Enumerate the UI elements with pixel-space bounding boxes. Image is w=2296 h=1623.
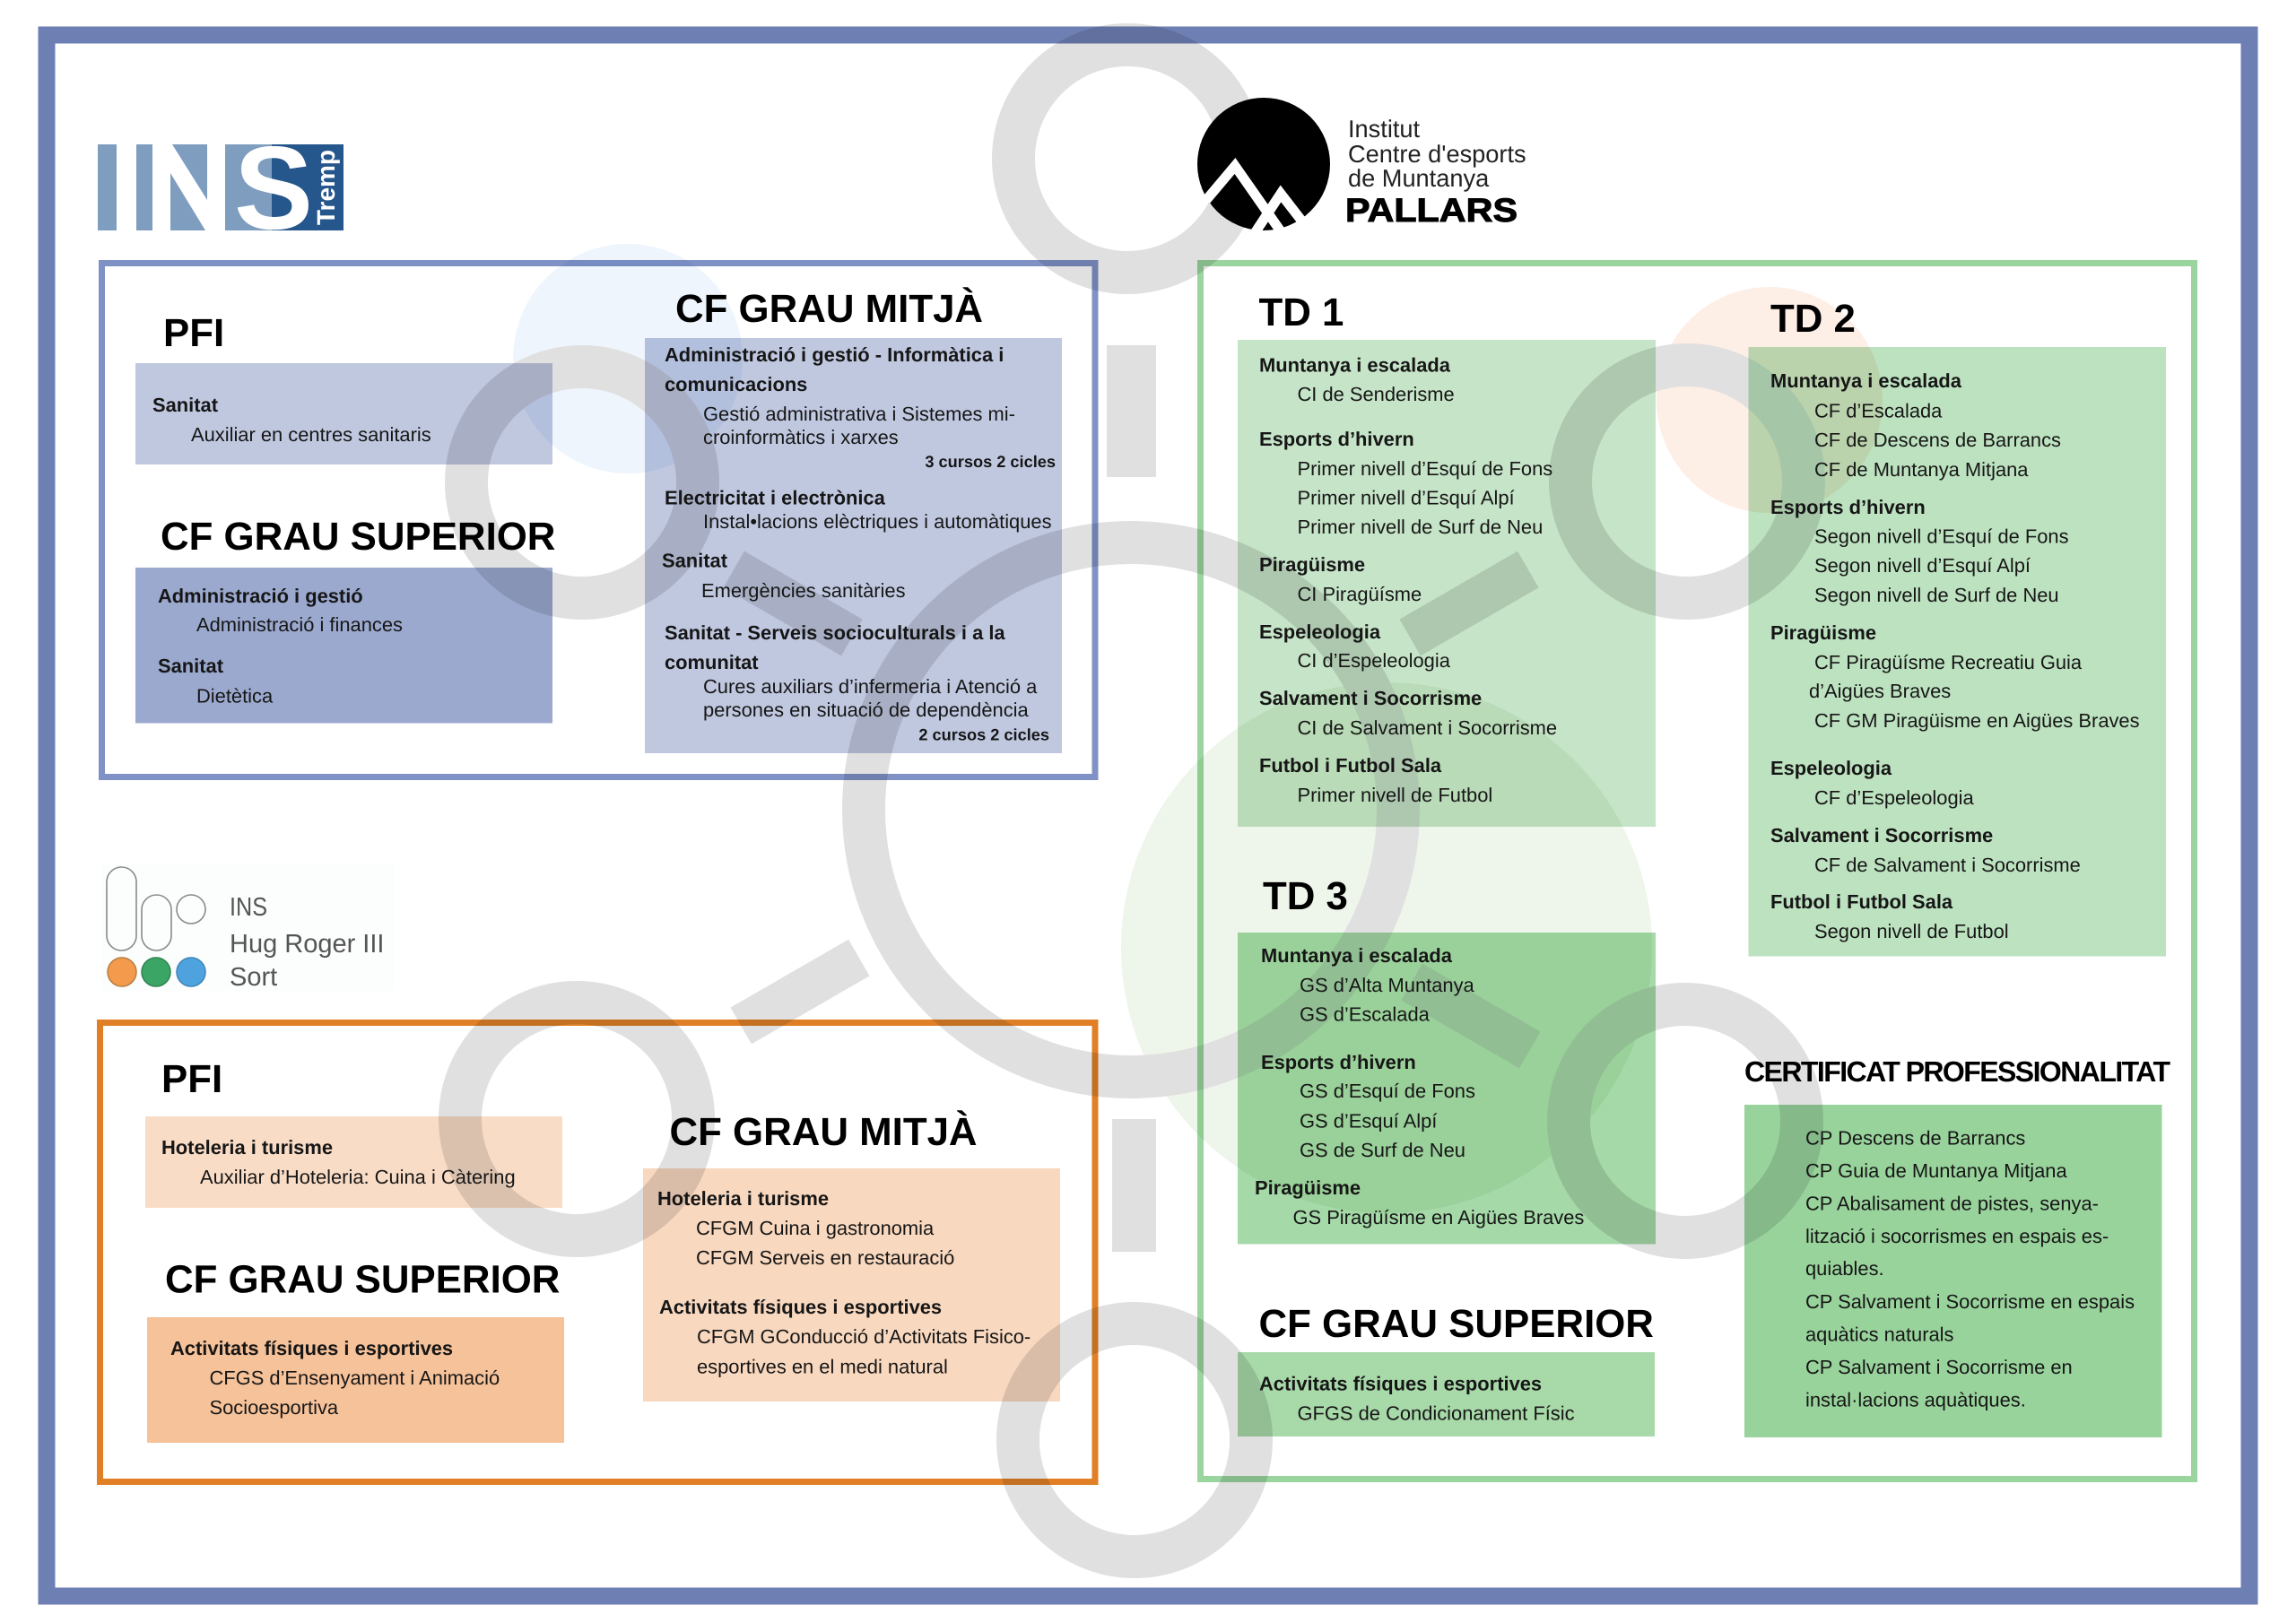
heading: TD 1: TD 1 [1259,291,1344,334]
box: TD 2: Piragüisme [1770,621,1876,644]
box: TD 1: CI de Salvament i Socorrisme [1297,716,1557,739]
box: TD 3: GS d’Alta Muntanya [1300,974,1475,996]
box: CF Grau Superior: Socioesportiva [210,1396,339,1419]
heading: CF Grau Mitjà: CF GRAU MITJÀ [675,287,983,331]
box: TD 2: Futbol i Futbol Sala [1770,890,1953,913]
box: TD 3: Piragüisme [1255,1176,1361,1199]
box: CF Grau Mitjà: Hoteleria i turisme [657,1187,829,1210]
box: TD 2: CF Piragüísme Recreatiu Guia [1814,651,2083,673]
heading: PFI: PFI [161,1057,222,1101]
heading: TD 3: TD 3 [1263,874,1348,918]
box: CF Grau Mitjà: CFGM Cuina i gastronomia [696,1217,935,1239]
box: CF Grau Mitjà: Activitats físiques i esportives [659,1296,942,1318]
box: Certificat Professionalitat: CP Abalisament de pistes, senya- [1805,1193,2099,1214]
box: TD 3: GS d’Esquí Alpí [1300,1110,1437,1132]
box: CF Grau Mitjà: 2 cursos 2 cicles [918,726,1049,744]
box: PFI Sanitat [135,363,552,464]
box: TD 2: CF de Salvament i Socorrisme [1814,854,2081,876]
logo: Institut Centre d'esports de Muntanya Pallars: Centre d'esports [1348,140,1526,168]
logo: INS Hug Roger III Sort [101,864,395,992]
box: CF Grau Mitjà: Emergències sanitàries [701,579,906,602]
heading: PFI: PFI [163,311,224,355]
logo: Institut Centre d'esports de Muntanya Pallars [1197,98,1526,233]
box: CF Grau Mitjà: comunicacions [665,373,807,395]
heading: CF Grau Superior: CF GRAU SUPERIOR [1259,1302,1654,1346]
box: TD 2: Segon nivell d’Esquí de Fons [1814,525,2069,547]
box: CF Grau Mitjà: Sanitat - Serveis socioculturals i a la [665,621,1005,644]
box: TD 2: Segon nivell d’Esquí Alpí [1814,554,2031,577]
box: CF Grau Mitjà: Electricitat i electrònica [665,486,886,509]
box: TD 2: Salvament i Socorrisme [1770,824,1993,846]
logo: Institut Centre d'esports de Muntanya Pallars: PALLARS [1345,192,1518,229]
box: TD 2: CF de Descens de Barrancs [1814,429,2061,451]
box: CF Grau Superior [147,1317,564,1443]
box: TD 2 [1749,347,2166,956]
box: TD 1: Salvament i Socorrisme [1259,687,1482,709]
box: TD 1: Muntanya i escalada [1259,353,1451,377]
box: CF Grau Mitjà: croinformàtics i xarxes [703,426,899,448]
box: Certificat Professionalitat [1744,1105,2161,1437]
box: TD 3: Esports d’hivern [1261,1051,1416,1073]
box: TD 1: CI Piragüísme [1297,583,1422,605]
panel: INS Tremp [102,264,1095,777]
box: CF Grau Mitjà [645,338,1062,753]
box: TD 3: GS d’Esquí de Fons [1300,1080,1475,1102]
box: CF Grau Superior: GFGS de Condicionament Físic [1297,1402,1575,1424]
box: TD 1 [1238,340,1656,827]
box: CF Grau Mitjà: comunitat [665,651,759,673]
box: TD 1: Esports d’hivern [1259,428,1414,450]
box: TD 3: GS Piragüísme en Aigües Braves [1293,1206,1584,1228]
box: TD 2: CF GM Piragüisme en Aigües Braves [1814,709,2140,732]
panel: INS Hug Roger III [100,1022,1095,1481]
box: PFI Hoteleria: Auxiliar d’Hoteleria: Cuina i Càtering [200,1166,516,1188]
box: Certificat Professionalitat: aquàtics naturals [1805,1324,1954,1345]
logo: Institut Centre d'esports de Muntanya Pallars: de Muntanya [1348,164,1490,192]
logo: INS Hug Roger III Sort: Sort [230,963,277,992]
box: CF Grau Superior: Sanitat [158,655,224,677]
box: CF Grau Superior: Administració i gestió [158,585,363,607]
box: CF Grau Mitjà: esportives en el medi natural [697,1356,948,1377]
box: TD 2: Espeleologia [1770,757,1892,779]
box: CF Grau Mitjà: 3 cursos 2 cicles [925,453,1056,471]
box: Certificat Professionalitat: quiables. [1805,1257,1884,1280]
box: CF Grau Superior [135,568,552,723]
logo: Institut Centre d'esports de Muntanya Pallars: Institut [1348,115,1421,143]
box: CF Grau Mitjà: persones en situació de dependència [703,699,1030,721]
box: TD 2: d’Aigües Braves [1809,680,1951,702]
box: TD 2: Segon nivell de Futbol [1814,920,2009,942]
logo: INS Tremp: S [234,122,313,254]
logo: INS Tremp: Tremp [312,150,340,225]
box: TD 1: Primer nivell d’Esquí Alpí [1297,486,1515,509]
box: TD 2: Segon nivell de Surf de Neu [1814,584,2059,606]
box: PFI Sanitat: Sanitat [152,394,219,416]
box: TD 1: CI d’Espeleologia [1297,649,1451,672]
box: TD 3: GS d’Escalada [1300,1002,1431,1026]
box: TD 1: Futbol i Futbol Sala [1259,754,1442,777]
box: TD 3: GS de Surf de Neu [1300,1139,1465,1161]
box: TD 3: Muntanya i escalada [1261,944,1453,967]
heading: CF Grau Superior: CF GRAU SUPERIOR [161,515,555,559]
box: Certificat Professionalitat: lització i socorrismes en espais es- [1805,1225,2109,1247]
box: PFI Hoteleria [145,1116,562,1208]
box: CF Grau Superior: Activitats físiques i esportives [170,1337,453,1359]
box: CF Grau Superior: Administració i finances [196,613,403,636]
box: CF Grau Mitjà: Cures auxiliars d’infermeria i Atenció a [703,675,1038,698]
box: Certificat Professionalitat: CP Descens de Barrancs [1805,1126,2025,1150]
logo: INS Hug Roger III Sort: INS [230,893,267,922]
box: CF Grau Mitjà [643,1168,1060,1402]
box: CF Grau Superior: Dietètica [196,685,274,707]
box: CF Grau Mitjà: Administració i gestió - Informàtica i [665,343,1004,366]
box: TD 2: CF d’Espeleologia [1814,786,1974,809]
box: TD 2: CF de Muntanya Mitjana [1814,458,2029,481]
box: CF Grau Superior [1238,1352,1655,1436]
box: CF Grau Mitjà: Sanitat [662,549,728,572]
box: TD 1: Espeleologia [1259,621,1381,643]
box: CF Grau Superior: CFGS d’Ensenyament i Animació [210,1367,500,1389]
box: TD 2: Muntanya i escalada [1770,369,1962,392]
box: TD 1: Primer nivell de Surf de Neu [1297,516,1543,538]
heading: Certificat Professionalitat: CERTIFICAT PROFESSIONALITAT [1744,1055,2170,1088]
box: Certificat Professionalitat: CP Guia de Muntanya Mitjana [1805,1159,2067,1182]
logo: INS Hug Roger III Sort: Hug Roger III [230,930,384,959]
box: TD 1: CI de Senderisme [1297,383,1455,405]
box: PFI Sanitat: Auxiliar en centres sanitaris [191,423,431,446]
box: TD 1: Primer nivell de Futbol [1297,784,1492,806]
logo: INS Tremp [98,122,344,254]
box: TD 2: Esports d’hivern [1770,496,1926,518]
box: CF Grau Mitjà: CFGM Serveis en restauració [696,1246,954,1269]
panel: Institut Pallars [1200,264,2194,1480]
box: CF Grau Mitjà: Gestió administrativa i Sistemes mi- [703,403,1015,425]
box: TD 1: Piragüisme [1259,553,1365,576]
box: PFI Hoteleria: Hoteleria i turisme [161,1136,333,1159]
box: TD 3 [1238,933,1656,1245]
heading: CF Grau Mitjà: CF GRAU MITJÀ [669,1110,978,1154]
box: TD 1: Primer nivell d’Esquí de Fons [1297,457,1552,480]
heading: TD 2: TD 2 [1770,297,1856,341]
box: Certificat Professionalitat: CP Salvament i Socorrisme en [1805,1356,2073,1378]
box: CF Grau Superior: Activitats físiques i esportives [1259,1372,1542,1395]
box: CF Grau Mitjà: Instal•lacions elèctriques i automàtiques [703,510,1052,533]
box: TD 2: CF d’Escalada [1814,400,1943,421]
heading: CF Grau Superior: CF GRAU SUPERIOR [165,1257,560,1302]
box: Certificat Professionalitat: instal·lacions aquàtiques. [1805,1388,2026,1411]
box: CF Grau Mitjà: CFGM GConducció d’Activitats Fisico- [697,1325,1031,1348]
box: Certificat Professionalitat: CP Salvament i Socorrisme en espais [1805,1290,2135,1313]
